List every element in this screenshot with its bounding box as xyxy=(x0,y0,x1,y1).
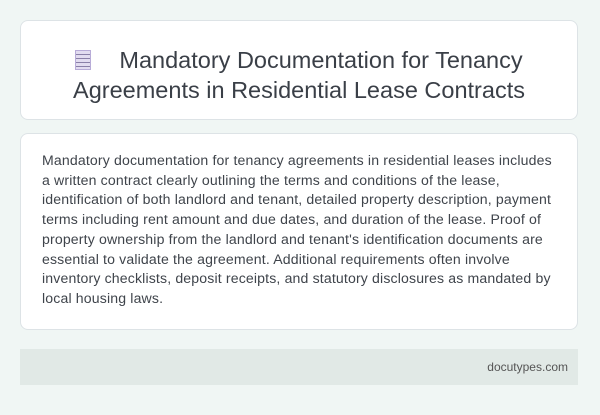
footer text: docutypes.com xyxy=(487,360,568,374)
text block: property ownership from the landlord and tenant's identification documents are xyxy=(42,231,543,247)
panel: title xyxy=(20,20,578,120)
panel: description xyxy=(20,133,578,330)
text block: a written contract clearly outlining the terms and conditions of the lease, xyxy=(42,172,500,188)
text block: inventory checklists, deposit receipts, and statutory disclosures as mandated by xyxy=(42,270,551,286)
footer xyxy=(20,349,578,385)
title: Mandatory Documentation for Tenancy xyxy=(119,47,523,73)
text block: essential to validate the agreement. Additional requirements often involve xyxy=(42,251,510,267)
text block: terms including rent amount and due dates, and duration of the lease. Proof of xyxy=(42,211,541,227)
title xyxy=(73,47,525,103)
title: Agreements in Residential Lease Contracts xyxy=(73,77,525,103)
text block: local housing laws. xyxy=(42,290,163,306)
text block xyxy=(42,152,552,306)
text block: identification of both landlord and tenant, detailed property description, payment xyxy=(42,191,551,207)
text block: Mandatory documentation for tenancy agreements in residential leases includes xyxy=(42,152,552,168)
icon: document xyxy=(75,50,91,70)
